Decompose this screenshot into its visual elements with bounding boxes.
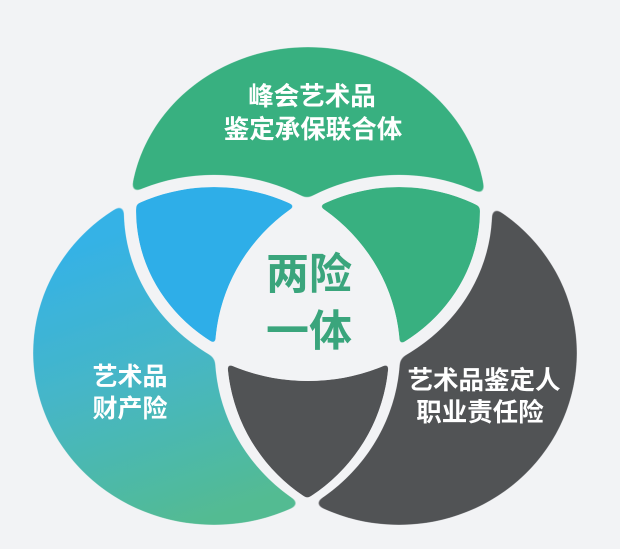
panel: green overlap petal [322,187,480,342]
heading: center title: 两险 [266,251,352,299]
text: top label: 鉴定承保联合体 [224,116,403,144]
text: right label: 职业责任险 [416,398,544,427]
panel: right crescent [318,210,577,525]
panel: dark overlap petal [228,366,388,498]
panel: top crescent [132,47,484,198]
text: right label: 艺术品鉴定人 [407,367,561,395]
text: top label: 峰会艺术品 [248,83,376,111]
text: left label: 财产险 [92,395,168,423]
text: left label [92,363,168,423]
panel: blue overlap petal [136,187,292,342]
text: right label [407,367,561,427]
text: left label: 艺术品 [92,363,168,391]
panel: left crescent [33,208,296,525]
heading: center title [266,251,352,356]
text: top label [224,83,403,144]
heading: center title: 一体 [266,308,352,356]
